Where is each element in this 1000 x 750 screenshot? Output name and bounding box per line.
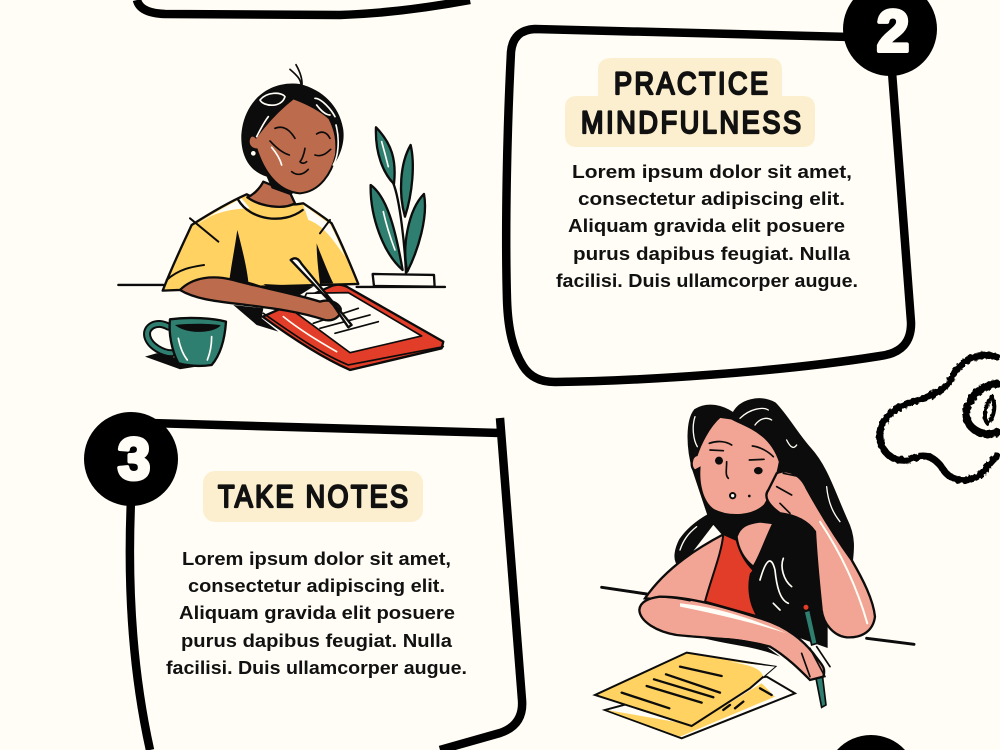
badge number 3 xyxy=(84,412,178,506)
body text: Aliquam gravida elit posuere xyxy=(568,215,845,236)
heading highlight xyxy=(203,471,423,522)
heading highlight xyxy=(565,58,815,147)
body text: purus dapibus feugiat. Nulla xyxy=(573,243,851,264)
tablet xyxy=(233,284,443,370)
pencil xyxy=(803,604,826,707)
neck and collar xyxy=(247,182,295,207)
papers xyxy=(595,653,795,738)
body text xyxy=(556,161,858,291)
arm and pen xyxy=(180,277,341,320)
badge number 3: 3 xyxy=(118,427,150,492)
body text: facilisi. Duis ullamcorper augue. xyxy=(556,270,858,291)
heading: MINDFULNESS xyxy=(581,106,801,140)
illustration: woman thinking with papers xyxy=(595,399,914,738)
illustration: woman writing on a tablet xyxy=(118,65,445,370)
hair xyxy=(675,399,853,647)
chest xyxy=(737,522,773,567)
body text: facilisi. Duis ullamcorper augue. xyxy=(166,657,467,678)
body text: consectetur adipiscing elit. xyxy=(578,188,845,209)
badge number 2: 2 xyxy=(877,0,909,64)
shirt xyxy=(163,194,358,291)
body text: purus dapibus feugiat. Nulla xyxy=(181,630,453,651)
plant xyxy=(371,127,435,287)
front arm xyxy=(639,597,824,680)
body text: Aliquam gravida elit posuere xyxy=(179,602,455,623)
badge number 2 xyxy=(843,0,937,76)
face details xyxy=(250,65,338,174)
table line xyxy=(118,285,445,287)
card outline xyxy=(130,418,522,750)
panel 3: take notes xyxy=(84,412,522,750)
heading: PRACTICE xyxy=(614,67,768,101)
card outline xyxy=(506,29,911,382)
face details xyxy=(680,408,840,550)
heading: TAKE NOTES xyxy=(218,480,408,514)
body text: Lorem ipsum dolor sit amet, xyxy=(572,161,852,182)
hair back xyxy=(241,84,344,195)
arm supporting head xyxy=(766,471,875,637)
panel 2: practice mindfulness xyxy=(506,0,937,382)
face xyxy=(692,417,780,515)
table line xyxy=(602,587,914,644)
body text: consectetur adipiscing elit. xyxy=(188,575,445,596)
panel 1: bottom edge of cropped card xyxy=(137,0,470,15)
shoulder xyxy=(645,534,724,603)
dress xyxy=(705,534,758,617)
face xyxy=(249,98,336,193)
panel 4: top of cropped number badge xyxy=(837,735,905,750)
body text: Lorem ipsum dolor sit amet, xyxy=(182,548,451,569)
coffee cup xyxy=(145,318,226,369)
decoration: scribbled flower outline xyxy=(880,355,997,480)
body text xyxy=(166,548,467,678)
heading xyxy=(581,67,801,140)
